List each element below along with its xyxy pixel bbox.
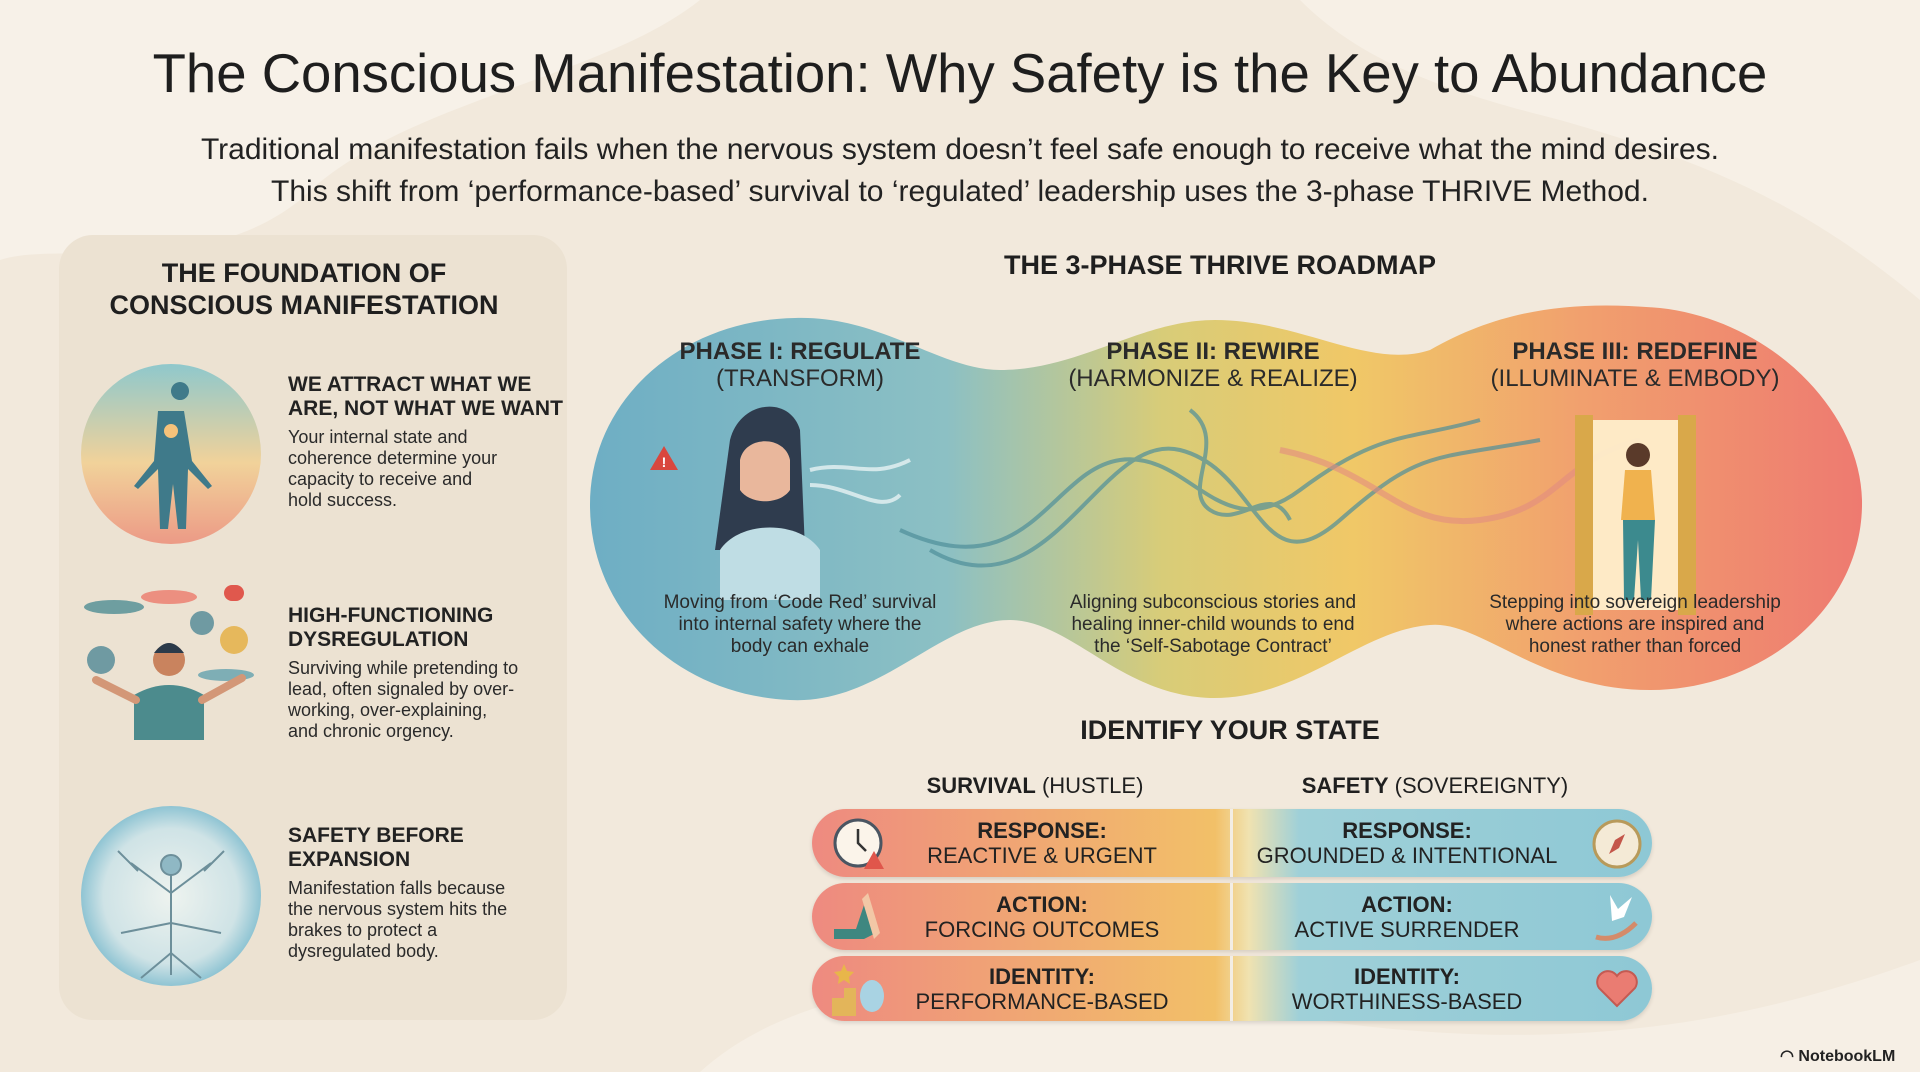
item 1 text: ARE, NOT WHAT WE WANT bbox=[288, 397, 563, 420]
text: honest rather than forced bbox=[1529, 636, 1741, 657]
item 2 text: Surviving while pretending to bbox=[288, 658, 518, 678]
item 3 text: EXPANSION bbox=[288, 848, 410, 871]
phase II text: PHASE II: REWIRE bbox=[1106, 338, 1320, 365]
text: into internal safety where the bbox=[679, 614, 921, 635]
text: where actions are inspired and bbox=[1506, 614, 1764, 635]
text: body can exhale bbox=[731, 636, 869, 657]
panel heading: CONSCIOUS MANIFESTATION bbox=[110, 290, 498, 320]
text: Moving from ‘Code Red’ survival bbox=[664, 592, 936, 613]
item 3 text: dysregulated body. bbox=[288, 941, 439, 961]
row: action: ACTION: bbox=[996, 892, 1088, 917]
row: identity: IDENTITY: bbox=[989, 964, 1095, 989]
wavy threads bbox=[900, 410, 1540, 566]
item 3 text: Manifestation falls because bbox=[288, 878, 505, 898]
row: action bbox=[812, 883, 1652, 950]
panel heading bbox=[110, 258, 498, 320]
row: response: GROUNDED & INTENTIONAL bbox=[1257, 843, 1557, 868]
phase III text: PHASE III: REDEFINE bbox=[1512, 338, 1758, 365]
text: Aligning subconscious stories and bbox=[1070, 592, 1356, 613]
item 2 text: working, over-explaining, bbox=[288, 700, 487, 720]
phase II text bbox=[1068, 338, 1358, 392]
item 1 text: coherence determine your bbox=[288, 448, 497, 468]
phase I text: PHASE I: REGULATE bbox=[680, 338, 920, 365]
title: The Conscious Manifestation: Why Safety is the Key to Abundance bbox=[153, 43, 1767, 104]
item 2 text bbox=[288, 604, 518, 741]
item 1 text: Your internal state and bbox=[288, 427, 467, 447]
row: response: RESPONSE: bbox=[1342, 818, 1472, 843]
item 2 text: and chronic orgency. bbox=[288, 721, 454, 741]
item 2 text: DYSREGULATION bbox=[288, 628, 468, 651]
woman figure phase I bbox=[715, 407, 805, 550]
item 3 text: SAFETY BEFORE bbox=[288, 824, 464, 847]
chart: roadmap blob: ! bbox=[662, 454, 666, 470]
chart: roadmap blob bbox=[590, 306, 1862, 700]
heading: roadmap: THE 3-PHASE THRIVE ROADMAP bbox=[1004, 250, 1436, 280]
item 3 text: brakes to protect a bbox=[288, 920, 437, 940]
icon: warning bbox=[650, 446, 678, 470]
item 2 text: lead, often signaled by over- bbox=[288, 679, 514, 699]
item 3 text bbox=[288, 824, 507, 961]
row: response: RESPONSE: bbox=[977, 818, 1107, 843]
row: identity bbox=[812, 956, 1652, 1021]
row: identity: PERFORMANCE-BASED bbox=[915, 989, 1169, 1014]
brand: NotebookLM: ◠ NotebookLM bbox=[1780, 1048, 1895, 1065]
panel: foundation bbox=[59, 235, 567, 1020]
panel heading: THE FOUNDATION OF bbox=[162, 258, 446, 288]
row: identity: WORTHINESS-BASED bbox=[1292, 989, 1522, 1014]
subtitle bbox=[201, 133, 1719, 208]
row: action: ACTIVE SURRENDER bbox=[1295, 917, 1519, 942]
item 1 text bbox=[288, 373, 563, 510]
row: identity: IDENTITY: bbox=[1354, 964, 1460, 989]
text: healing inner-child wounds to end bbox=[1071, 614, 1355, 635]
icon: juggling person bbox=[84, 585, 254, 740]
phase III text: (ILLUMINATE & EMBODY) bbox=[1491, 365, 1779, 392]
door phase III bbox=[1590, 420, 1680, 610]
item 2 text: HIGH-FUNCTIONING bbox=[288, 604, 493, 627]
row: action: FORCING OUTCOMES bbox=[925, 917, 1159, 942]
row: action: ACTION: bbox=[1361, 892, 1453, 917]
icon: body circle bbox=[81, 364, 261, 544]
text: the ‘Self-Sabotage Contract’ bbox=[1094, 636, 1332, 657]
row: response bbox=[812, 809, 1652, 877]
phase I text bbox=[680, 338, 920, 392]
row: response: REACTIVE & URGENT bbox=[927, 843, 1157, 868]
icon: nervous system sphere bbox=[81, 806, 261, 986]
item 3 text: the nervous system hits the bbox=[288, 899, 507, 919]
subtitle: This shift from ‘performance-based’ survival to ‘regulated’ leadership uses the 3-phase THRIVE Method. bbox=[271, 175, 1649, 208]
column headers: SURVIVAL (HUSTLE) bbox=[927, 773, 1143, 798]
text: SAFETY (SOVEREIGNTY) bbox=[1302, 773, 1568, 798]
subtitle: Traditional manifestation fails when the nervous system doesn’t feel safe enough to receive what the mind desires. bbox=[201, 133, 1719, 166]
item 1 text: hold success. bbox=[288, 490, 397, 510]
item 1 text: WE ATTRACT WHAT WE bbox=[288, 373, 531, 396]
phase II text: (HARMONIZE & REALIZE) bbox=[1068, 365, 1358, 392]
item 1 text: capacity to receive and bbox=[288, 469, 472, 489]
comparison table bbox=[811, 809, 1653, 1024]
phase I text: (TRANSFORM) bbox=[716, 365, 884, 392]
phase III text bbox=[1491, 338, 1779, 392]
text: Stepping into sovereign leadership bbox=[1489, 592, 1781, 613]
heading: identify your state: IDENTIFY YOUR STATE bbox=[1080, 715, 1380, 745]
